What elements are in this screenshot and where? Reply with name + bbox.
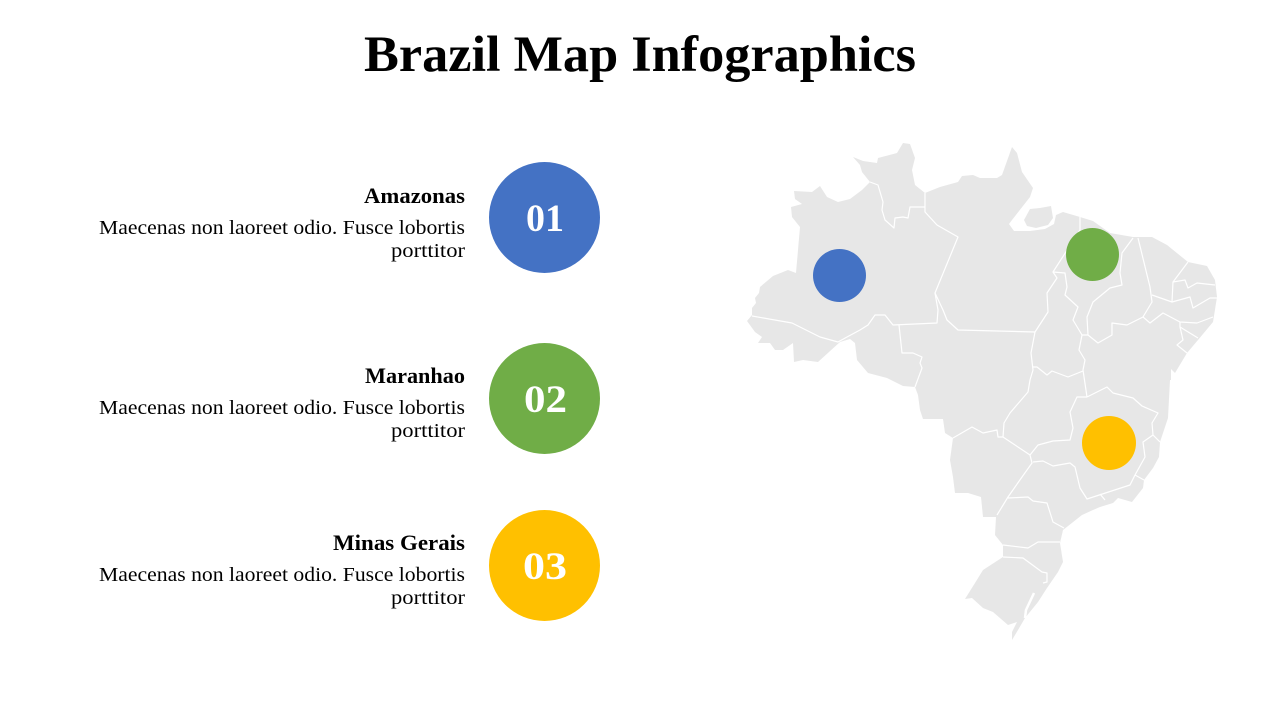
map marker: Maranhao xyxy=(1066,228,1119,281)
badge: 03: 03 xyxy=(523,545,567,588)
map of Brazil xyxy=(747,143,1217,640)
title: Brazil Map Infographics xyxy=(364,27,916,83)
badge: 01 xyxy=(489,162,600,273)
badge: 01: 01 xyxy=(526,197,564,240)
heading: Minas Gerais: Minas Gerais xyxy=(333,530,465,555)
map: country silhouette xyxy=(747,143,1217,640)
map marker: Amazonas xyxy=(813,249,866,302)
badge: 03 xyxy=(489,510,600,621)
text block: Maranhao description xyxy=(99,397,465,442)
heading: Amazonas: Amazonas xyxy=(364,183,465,208)
text block: Minas Gerais description: Maecenas non laoreet odio. Fusce lobortis xyxy=(99,564,465,586)
text block: Amazonas description: Maecenas non laoreet odio. Fusce lobortis xyxy=(99,217,465,239)
panel: Amazonas item xyxy=(99,162,600,273)
map marker: Minas Gerais xyxy=(1082,416,1136,470)
panel: Minas Gerais item xyxy=(99,510,600,621)
badge: 02: 02 xyxy=(524,378,567,421)
text block: Minas Gerais description xyxy=(99,564,465,609)
badge: 02 xyxy=(489,343,600,454)
text block: Maranhao description: porttitor xyxy=(391,420,465,442)
text block: Maranhao description: Maecenas non laoreet odio. Fusce lobortis xyxy=(99,397,465,419)
map: Marajo island xyxy=(1024,206,1053,228)
text block: Amazonas description xyxy=(99,217,465,262)
map: state borders xyxy=(752,182,1217,618)
heading: Maranhao: Maranhao xyxy=(365,363,465,388)
text block: Minas Gerais description: porttitor xyxy=(391,587,465,609)
text block: Amazonas description: porttitor xyxy=(391,240,465,262)
panel: Maranhao item xyxy=(99,343,600,454)
